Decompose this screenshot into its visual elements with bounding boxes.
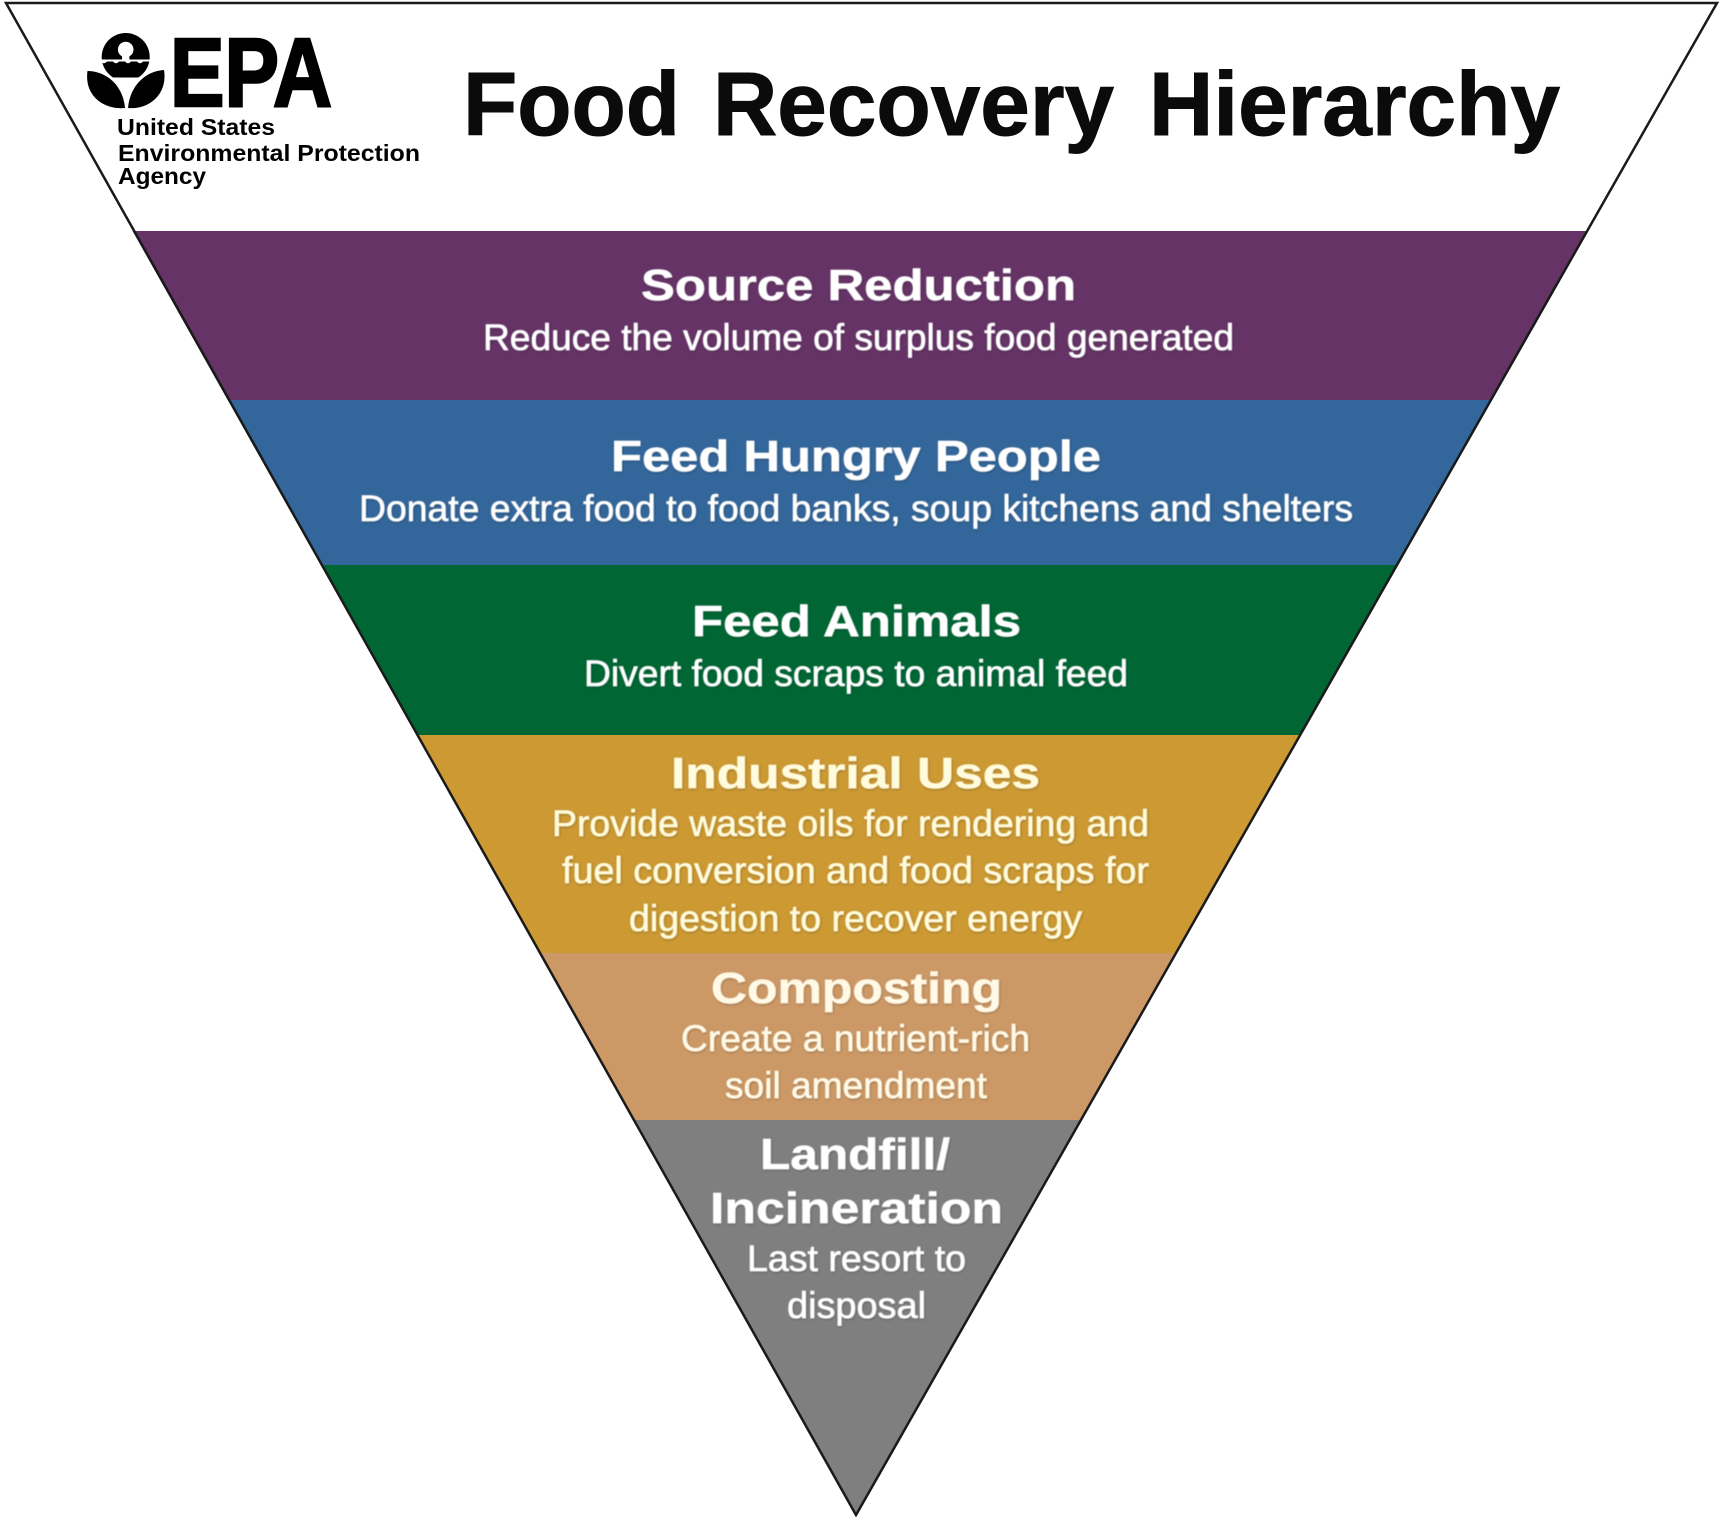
description: Industrial Uses: digestion to recover energy: [629, 898, 1083, 939]
description: Source Reduction: Reduce the volume of surplus food generated: [483, 317, 1234, 358]
title: [463, 55, 1560, 155]
band: Landfill / Incineration: [633, 1120, 1081, 1515]
heading: Landfill / Incineration: [710, 1130, 1003, 1233]
agency name: United States: [117, 114, 275, 140]
icon: EPA emblem: [87, 33, 165, 108]
title: Hierarchy: [1149, 55, 1560, 155]
heading: Industrial Uses: Industrial Uses: [671, 749, 1040, 798]
band: Composting: [539, 953, 1176, 1120]
band: Industrial Uses: [416, 735, 1300, 953]
description: Landfill / Incineration: Last resort to: [747, 1238, 966, 1279]
title: Recovery: [713, 55, 1114, 155]
description: Industrial Uses: [552, 803, 1149, 939]
agency name: Environmental Protection: [118, 140, 420, 166]
EPA wordmark: EPA: [170, 18, 332, 127]
description: Landfill / Incineration: disposal: [787, 1285, 926, 1326]
heading: Feed Hungry People: Feed Hungry People: [611, 432, 1101, 481]
description: Feed Hungry People: Donate extra food to food banks, soup kitchens and shelters: [359, 488, 1353, 529]
description: Composting: Create a nutrient-rich: [681, 1018, 1030, 1059]
title: Food: [463, 55, 680, 155]
description: Landfill / Incineration: [747, 1238, 966, 1326]
description: Industrial Uses: fuel conversion and food scraps for: [562, 850, 1149, 891]
band: Feed Hungry People: [228, 400, 1491, 565]
description: Composting: soil amendment: [725, 1065, 988, 1106]
heading: Landfill / Incineration: Landfill/: [760, 1130, 950, 1179]
heading: Composting: Composting: [711, 964, 1002, 1013]
heading: Landfill / Incineration: Incineration: [710, 1184, 1003, 1233]
description: Composting: [681, 1018, 1030, 1106]
heading: Feed Animals: Feed Animals: [692, 597, 1021, 646]
band: Feed Animals: [321, 565, 1397, 735]
agency name: Agency: [118, 163, 206, 189]
title panel: white top of inverted pyramid: [6, 3, 1717, 231]
EPA logo: [87, 18, 420, 189]
agency name: [117, 114, 420, 189]
description: Feed Animals: Divert food scraps to animal feed: [584, 653, 1128, 694]
heading: Source Reduction: Source Reduction: [641, 261, 1076, 310]
description: Industrial Uses: Provide waste oils for rendering and: [552, 803, 1149, 844]
band: Source Reduction: [132, 231, 1587, 400]
